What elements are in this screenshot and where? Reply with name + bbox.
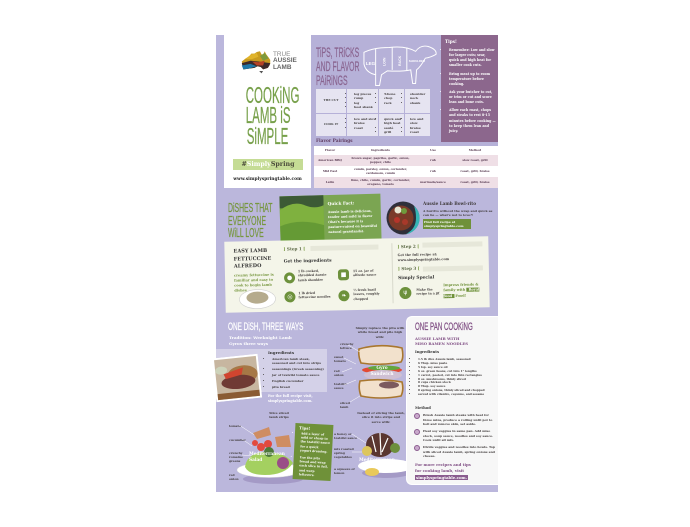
row: latin: lime, chile, cumin, garlic, coriander, oregano, tomato: [351, 178, 410, 186]
ingredients list: 6 oz. green beans, cut into 1" lengths: [418, 369, 477, 373]
step 1 heading: ] Step 1 [: [283, 246, 305, 252]
heading: cooking lamb is simple: SiMPLE: [247, 123, 288, 149]
panel: tips: [441, 35, 498, 142]
row: latin: Latin: [326, 180, 334, 184]
label: crunchy greens: romaine: [229, 455, 243, 459]
photo: pasture: [279, 195, 324, 240]
label: red onion: red: [334, 369, 340, 373]
heading: dishes that everyone will love: WiLL LOVE: [228, 226, 264, 240]
row: american bbq: American BBQ: [318, 158, 342, 162]
label: crunchy lettuce: lettuce: [340, 346, 352, 350]
row: mid east: rub: [430, 169, 436, 173]
ingredient: basil: [338, 288, 380, 302]
ingredient: noodles: [284, 291, 331, 302]
cells: cook it, loin: sauté: [384, 126, 393, 130]
subheading: traditional weeknight lamb: Tradition: Weeknight Lamb: [229, 335, 292, 340]
illustration: lamb rice bowl: [350, 430, 406, 480]
label: sliced lamb: [340, 401, 350, 409]
salad label: [249, 452, 285, 463]
ingredients list: 6 Tbsp. miso paste: [418, 361, 447, 365]
icon: cutlery: ψ: [403, 289, 407, 296]
panel: tips card: [293, 423, 333, 481]
label: crunchy lettuce: crunchy: [340, 342, 354, 346]
ingredients list: seasonings (Greek seasoning): [272, 367, 324, 371]
table header: Use: [430, 148, 436, 152]
cells: cook it, shoulder: low and slow: [410, 117, 423, 125]
sandwich label: Gyro: [376, 366, 388, 371]
sandwich label: Sandwich: [370, 372, 394, 377]
more recipes: For more recipes and tips: [415, 462, 471, 467]
panel: quick fact: [279, 194, 382, 244]
ingredient: basil: ⅓ fresh basil leaves, roughly chopped: [353, 288, 380, 301]
heading: one dish, three ways: ONE DiSH, THREE WAYS: [228, 321, 303, 333]
ingredients list: 8 oz. mushrooms, thinly sliced: [418, 377, 466, 381]
cells: the cut, leg: rump: [354, 96, 363, 100]
label: tzatziki sauce: tzatziki: [334, 382, 346, 386]
flavor pairings heading: Flavor Pairings: [316, 139, 353, 144]
cells: cook it, shoulder: [405, 114, 430, 136]
row: american bbq: slow roast, grill: [462, 158, 488, 162]
label: crunchy greens: [229, 451, 243, 463]
ingredient: sauce: [338, 269, 376, 280]
cells: cook it, loin: [379, 114, 404, 136]
ingredients list: 8 Tbsp. soy sauce: [418, 384, 445, 388]
icon: pasta plate: [239, 289, 276, 309]
label: red onion: onion: [229, 477, 239, 481]
icon: cutlery: [399, 287, 412, 299]
ingredient: sauce: ■: [341, 271, 346, 278]
tips list: Ask your butcher to cut, or trim or cut and score lean and bone cuts.: [449, 90, 492, 104]
logo: true aussie lamb: [242, 51, 270, 74]
heading: dishes that everyone will love: EVERYONE: [228, 214, 266, 228]
cells: the cut, leg: heel shank: [354, 105, 373, 109]
step 3 bar: [423, 265, 483, 272]
label: red onion: [229, 473, 239, 481]
row: american bbq: [314, 155, 498, 166]
cells: the cut, loin: rack: [384, 101, 392, 105]
row label: cook it: COOK IT: [324, 122, 338, 126]
ingredient: noodles: 1 lb dried fettuccine noodles: [298, 291, 331, 300]
cells: cook it, leg: low and slow: [354, 117, 376, 121]
heading: tips, tricks and flavor pairings: [316, 45, 360, 88]
subheading: traditional weeknight lamb: Gyros three ways: [229, 341, 268, 346]
ingredients list: 1 carrot, peeled, cut into thin rectangles: [418, 373, 482, 377]
cells: the cut, leg: leg: [354, 101, 359, 105]
ingredients list: 8 cups chicken stock: [418, 380, 451, 384]
illustration: lamb cuts: SHOULDER: [409, 59, 426, 63]
step 2 bar: [422, 241, 482, 248]
illustration: lamb cuts: LOIN: [382, 57, 386, 66]
recipe link box: Find full recipe at simplyspringtable.com: [424, 220, 464, 228]
logo wordmark: LAMB: [273, 64, 291, 71]
table header: Flavor: [325, 148, 335, 152]
ingredients list: [415, 358, 497, 397]
step 3: Divide veggies and noodles into bowls. Top with sliced Aussie lamb, spring onions and cheese.: [423, 445, 495, 458]
heading: tips, tricks and flavor pairings: PAiRiNGS: [316, 73, 348, 88]
label: crunchy greens: greens: [229, 459, 240, 463]
row: american bbq: brown sugar, paprika, garlic, onion, pepper, chile: [352, 156, 410, 164]
recipe title: MISO RAMEN NOODLES: [415, 341, 468, 346]
label: tzatziki sauce: sauce: [334, 386, 344, 390]
bowl label: Mediterranean: [359, 458, 395, 463]
hashtag banner: #SimplySpring: [242, 161, 294, 168]
label: red onion: red: [229, 473, 235, 477]
sandwich label: [370, 366, 394, 377]
recipe title: [415, 336, 495, 346]
label: sauce: [334, 432, 357, 440]
step 1 subtitle: Get the ingredients: [284, 259, 332, 265]
step 2 text: Get the full recipe at: www.simplyspringtable.com: [398, 252, 449, 262]
text: salad intro: Slice sliced lamb strips: [269, 411, 289, 419]
panel: recipe card: [224, 236, 490, 313]
ingredients list: pita bread: [272, 385, 290, 389]
tips card text: Add a layer of mild or sharp to the tzatziki sauce for a quick yogurt dressing.: [300, 431, 330, 454]
cells: the cut, loin: chop: [384, 96, 392, 100]
ingredient: lamb: ●: [287, 274, 292, 281]
cells: the cut, leg: leg pieces: [354, 92, 371, 96]
label: red onion: onion: [334, 373, 344, 377]
ingredient: sauce: 15 oz. jar of alfredo sauce: [353, 269, 376, 277]
more recipes: [415, 462, 498, 481]
photo: lamb gyro: [214, 354, 262, 402]
ingredients list: jar of tzatziki tomato sauce: [272, 373, 319, 377]
connector lines: [239, 344, 366, 456]
step 2 heading: ] Step 2 [: [397, 244, 419, 249]
ingredients list: English cucumber: [272, 379, 304, 383]
tips list: Remember: Low and slow for larger cuts; sear, quick and high heat for smaller cook cuts.: [449, 48, 494, 67]
ingredients heading: Ingredients: [415, 350, 439, 354]
ingredients list: 1.5 lb dice Aussie lamb, seasoned: [418, 357, 471, 361]
illustration: lamb cuts: [364, 46, 437, 86]
row: mid east: roast, grill, braise: [460, 169, 490, 173]
step 1 bar: [310, 245, 378, 251]
cells: the cut, shoulder: shoulder: [410, 92, 425, 96]
heading: cooking lamb is simple: [246, 82, 299, 149]
cells: the cut, loin: T-bone: [384, 92, 396, 96]
ingredient: basil: ❧: [341, 292, 347, 299]
ingredient: lamb: 1 lb cooked, shredded Aussie lamb shoulder: [298, 269, 326, 282]
row label: cook it: [316, 114, 346, 136]
panel: aussie lamb bowl-rito: [423, 201, 492, 229]
row: latin: roast, grill, braise: [460, 180, 490, 184]
ingredients heading: Ingredients: [268, 350, 294, 355]
heading: tips, tricks and flavor pairings: TiPS, TRiCKS: [316, 45, 359, 60]
label: cucumber: cucumber: [229, 438, 246, 442]
label: sweet tomato: sweet: [334, 355, 343, 359]
label: sliced lamb: lamb: [340, 405, 348, 409]
tips list: Allow each roast, chops and steaks to rest 8-15 minutes before cooking — to keep them lean and juicy.: [449, 108, 496, 133]
label: red onion: [334, 369, 344, 377]
cells: the cut, shoulder: [405, 89, 430, 113]
text: sandwich intro: Simply replace the pita with white bread and pile high with:: [356, 326, 404, 339]
ingredients list: American lamb steak, seasoned and cut into strips: [272, 357, 321, 365]
ingredient: lamb: [284, 269, 326, 284]
recipe link box: [423, 219, 471, 229]
tips card heading: Tips!: [299, 425, 310, 431]
heading: tips, tricks and flavor pairings: AND FLAVOR: [316, 59, 359, 74]
recipe pointer text: For the full recipe visit, simplyspringtable.com.: [268, 394, 313, 403]
ingredients list: [263, 357, 324, 389]
label: sauce: a honey or: [334, 432, 352, 436]
cells: the cut, leg: [347, 89, 378, 113]
quick fact text: Quick Fact:: [328, 200, 354, 206]
heading: cooking lamb is simple: LAMB iS: [246, 102, 290, 128]
divider: [391, 243, 394, 303]
logo wordmark: AUSSIE: [273, 57, 297, 64]
label: vegetables: mix roasted spring vegetables: [334, 447, 354, 459]
cells: cook it, loin: quick and high heat: [384, 117, 401, 125]
panel: tips, tricks background: [311, 35, 498, 146]
step 3 subtitle: Simply Special: [398, 275, 434, 281]
ingredients list: 8 spring onions, thinly sliced and chopped: [418, 388, 485, 392]
panel: one pan cooking: [406, 316, 498, 485]
illustration: mediterranean salad: [236, 427, 302, 484]
illustration: lamb cuts: RACK: [398, 55, 402, 66]
recipe title: ALFREDO: [234, 263, 261, 270]
cells: cook it, loin: grill: [384, 130, 391, 134]
tips list: [440, 48, 496, 133]
tips heading: Tips!: [445, 39, 457, 44]
step 2: Heat soy veggies in same pan. Add miso stock, soup sauce, noodles and soy sauce. Cook until all mix.: [423, 429, 493, 442]
chart: the cut and cook it grid: [316, 89, 430, 136]
row label: the cut: THE CUT: [323, 98, 339, 102]
tips card text: [296, 431, 331, 478]
bowl-rito text: A burrito without the wrap and quick as can be — what's not to love?!: [423, 209, 492, 217]
hashtag banner: [233, 159, 303, 170]
row label: the cut: [316, 89, 346, 113]
illustration: lamb cuts: LEG: [366, 61, 376, 66]
page background: [216, 35, 498, 492]
recipe title: EASY LAMB: [233, 248, 267, 255]
ingredients list: 5 tsp. soy sauce oil: [418, 365, 448, 369]
method heading: Method: [415, 406, 431, 410]
quick fact text: Aussie lamb is delicious, tender and mild in flavor (that's because it is pasture-raised on beautiful natural grasslands).: [328, 209, 377, 234]
heading: dishes that everyone will love: DiSHES THAT: [228, 201, 272, 215]
row: mid east: [314, 166, 498, 177]
step 3 heading: ] Step 3 [: [398, 266, 420, 271]
labels: salad ingredients: [229, 424, 246, 481]
label: crunchy lettuce: [340, 342, 354, 350]
row: american bbq: rub: [430, 158, 436, 162]
bowl label: [359, 458, 395, 470]
table header: Method: [469, 148, 481, 152]
label: sweet tomato: tomato: [334, 359, 346, 363]
panel: ingredients: [216, 349, 327, 392]
bowl label: Lamb Bowl: [359, 464, 386, 469]
subheading: traditional weeknight lamb: [229, 335, 292, 346]
recipe title: AUSSIE LAMB WITH: [415, 336, 459, 341]
table: flavor pairings: [314, 146, 498, 188]
table header: Ingredients: [371, 148, 390, 152]
heading: dishes that everyone will love: [228, 201, 272, 240]
text: bowl intro: Instead of slicing the lamb, slice it into strips and serve with:: [357, 411, 405, 424]
cells: cook it, leg: braise: [354, 121, 365, 125]
heading: one pan cooking: ONE PAN COOKiNG: [415, 321, 473, 333]
row: latin: [314, 177, 498, 188]
label: asparagus: a squeeze of lemon: [334, 467, 355, 475]
recipe title: [233, 248, 272, 270]
cells: the cut, loin: [379, 89, 404, 113]
label: wraps: tomato: [229, 424, 241, 428]
panel: title: [224, 35, 311, 188]
recipe title: FETTUCCINE: [234, 255, 271, 262]
salad label: Mediterranean: [249, 452, 285, 457]
recipe description: creamy fettuccine is familiar and easy to cook to begin lamb dishes: [234, 273, 274, 293]
bowl-rito heading: Aussie Lamb Bowl-rito: [423, 201, 476, 206]
step 1: Brush Aussie lamb steaks with heat for three mins, produce a rolling until pot to boil and remove skin, set aside.: [423, 413, 492, 426]
tips list: Bring meat up to room temperature before cooking.: [449, 72, 490, 86]
labels: rice bowl ingredients: [334, 432, 362, 480]
cells: cook it, shoulder: braise: [410, 126, 421, 130]
label: sauce: tzatziki sauce: [334, 436, 357, 440]
cells: cook it, shoulder: roast: [410, 130, 419, 134]
website: www.simplyspringtable.com: [233, 177, 302, 182]
cells: cook it, leg: roast: [354, 126, 363, 130]
cells: cook it, leg: [347, 114, 378, 136]
ingredients list: served with cilantro, cayenne, and sesame: [418, 392, 484, 396]
labels: sandwich ingredients: [334, 342, 354, 409]
row: latin: marinade/sauce: [420, 180, 446, 184]
impress text: Impress friends & family with Royal food Food!: [443, 282, 479, 298]
icon: bowl photo: [386, 202, 420, 234]
tips card text: Use the pita bread and wrap each slice in foil, and warp leftovers.: [299, 455, 328, 477]
heading: cooking lamb is simple: COOKiNG: [246, 82, 299, 108]
logo wordmark: TRUE: [273, 51, 290, 58]
label: sliced lamb: sliced: [340, 401, 350, 405]
row: mid east: Mid East: [323, 169, 337, 173]
label: crunchy greens: crunchy: [229, 451, 243, 455]
row: mid east: cumin, parsley, onion, coriander, cardamom, cumin: [354, 167, 407, 174]
cells: the cut, shoulder: neck: [410, 96, 418, 100]
step 3 text: Make the recipe in a jif: [416, 287, 440, 296]
logo wordmark: [273, 51, 297, 71]
salad label: Salad: [249, 458, 262, 463]
more recipes: simplyspringtable.com.: [416, 475, 467, 480]
illustration: gyro sandwich: [358, 344, 404, 399]
ingredient: noodles: ◎: [287, 293, 293, 300]
cells: the cut, shoulder: shank: [410, 101, 420, 105]
label: tzatziki sauce: [334, 382, 346, 390]
more recipes: for cooking lamb, visit: [415, 468, 464, 473]
table header: [325, 148, 482, 152]
label: sweet tomato: [334, 355, 346, 363]
